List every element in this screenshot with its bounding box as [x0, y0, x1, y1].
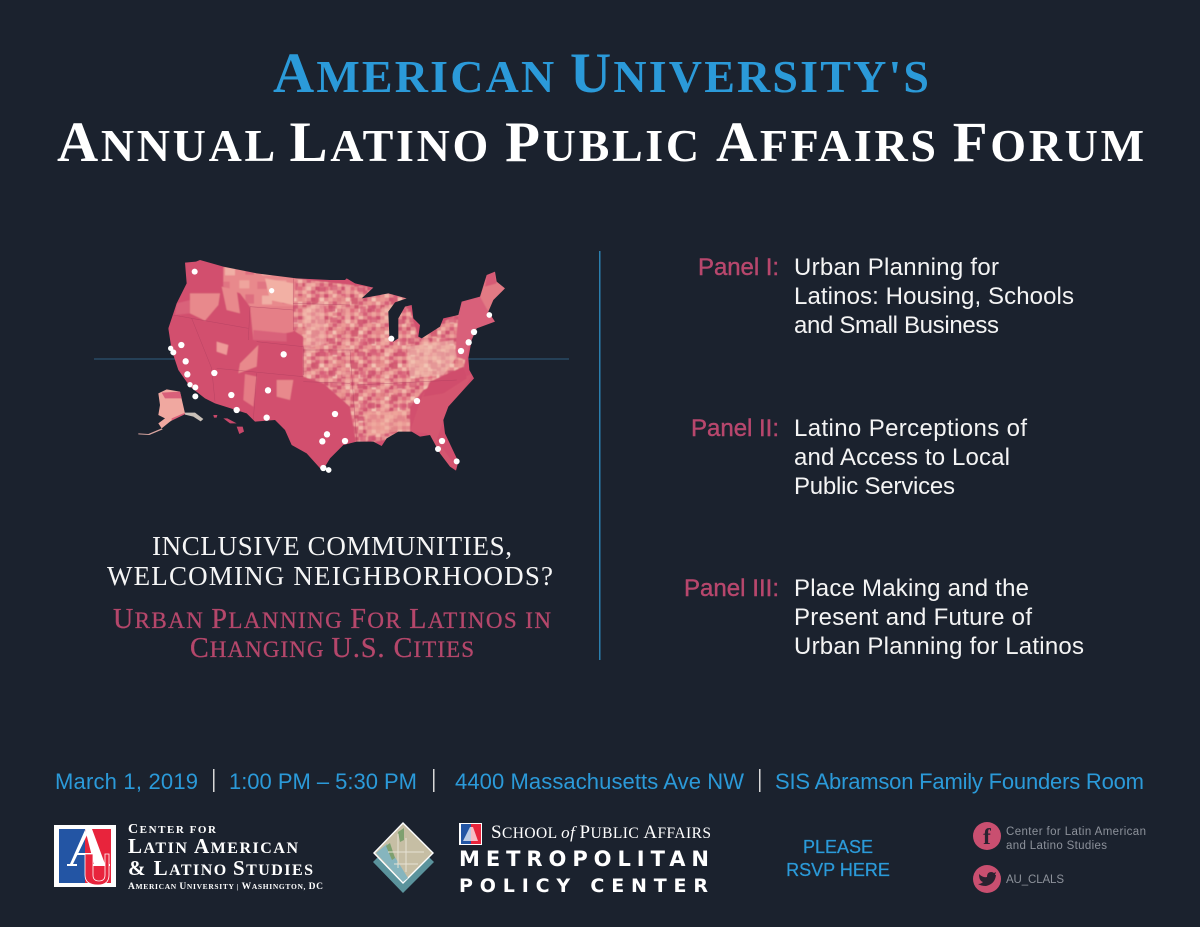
panel II: Panel II:	[691, 415, 779, 442]
panel I: Urban Planning for	[794, 254, 999, 281]
title: ANNUAL LATINO PUBLIC AFFAIRS FORUM	[57, 111, 1144, 174]
panel III: Present and Future of	[794, 604, 1032, 631]
conference theme heading: INCLUSIVE COMMUNITIES,	[152, 531, 512, 561]
panel I: and Small Business	[794, 312, 999, 339]
title	[57, 42, 1144, 174]
map of the United States	[138, 260, 505, 473]
Facebook contact: f	[983, 824, 991, 849]
School of Public Affairs logo and wordmark: SCHOOL of PUBLIC AFFAIRS	[491, 822, 711, 843]
panel III	[684, 575, 1084, 660]
vertical divider	[599, 251, 600, 660]
event details bar: SIS Abramson Family Founders Room	[775, 769, 1144, 794]
city markers	[168, 269, 492, 473]
conference theme heading: WELCOMING NEIGHBORHOODS?	[107, 561, 553, 591]
Facebook contact: Center for Latin American	[1006, 826, 1146, 838]
conference theme heading	[107, 531, 553, 591]
Twitter contact: AU_CLALS	[1006, 874, 1064, 886]
panel II	[691, 415, 1027, 500]
panel I	[698, 254, 1074, 339]
panel II: and Access to Local	[794, 444, 1010, 471]
event details bar: March 1, 2019	[55, 769, 198, 794]
panel I: Latinos: Housing, Schools	[794, 283, 1074, 310]
event details bar	[55, 769, 1144, 794]
event details bar: 1:00 PM – 5:30 PM	[229, 769, 417, 794]
conference subtitle: URBAN PLANNING FOR LATINOS IN	[113, 604, 551, 635]
panel II: Public Services	[794, 473, 955, 500]
state lines	[173, 278, 457, 442]
Center for Latin American and Latino Studies wordmark: AMERICAN UNIVERSITY | WASHINGTON, DC	[128, 882, 323, 892]
panel III: Panel III:	[684, 575, 779, 602]
RSVP call to action: PLEASE	[803, 837, 873, 857]
Alaska and Hawaii	[138, 389, 244, 435]
logo: Metropolitan Policy Center diamond	[373, 822, 434, 893]
Center for Latin American and Latino Studies wordmark	[128, 822, 323, 892]
panel II: Latino Perceptions of	[794, 415, 1027, 442]
panel III: Place Making and the	[794, 575, 1029, 602]
RSVP call to action: RSVP HERE	[786, 860, 890, 880]
Center for Latin American and Latino Studies wordmark: & LATINO STUDIES	[128, 856, 313, 880]
Center for Latin American and Latino Studies wordmark: CENTER FOR	[128, 822, 217, 837]
School of Public Affairs logo and wordmark	[459, 822, 711, 897]
Facebook contact: and Latino Studies	[1006, 840, 1107, 852]
panel I: Panel I:	[698, 254, 779, 281]
logo: AU shield	[54, 825, 116, 887]
panel III: Urban Planning for Latinos	[794, 633, 1084, 660]
Center for Latin American and Latino Studies wordmark: LATIN AMERICAN	[128, 834, 298, 858]
Facebook contact	[973, 822, 1146, 852]
School of Public Affairs logo and wordmark: METROPOLITAN	[459, 847, 709, 871]
conference subtitle	[113, 604, 551, 664]
RSVP call to action	[786, 837, 890, 880]
title: AMERICAN UNIVERSITY'S	[273, 42, 929, 105]
Twitter contact	[973, 865, 1064, 893]
horizontal map rule	[94, 358, 569, 360]
event details bar: 4400 Massachusetts Ave NW	[455, 769, 744, 794]
conference subtitle: CHANGING U.S. CITIES	[190, 633, 474, 664]
regional tone overlays	[455, 297, 495, 360]
School of Public Affairs logo and wordmark: POLICY CENTER	[459, 875, 708, 897]
